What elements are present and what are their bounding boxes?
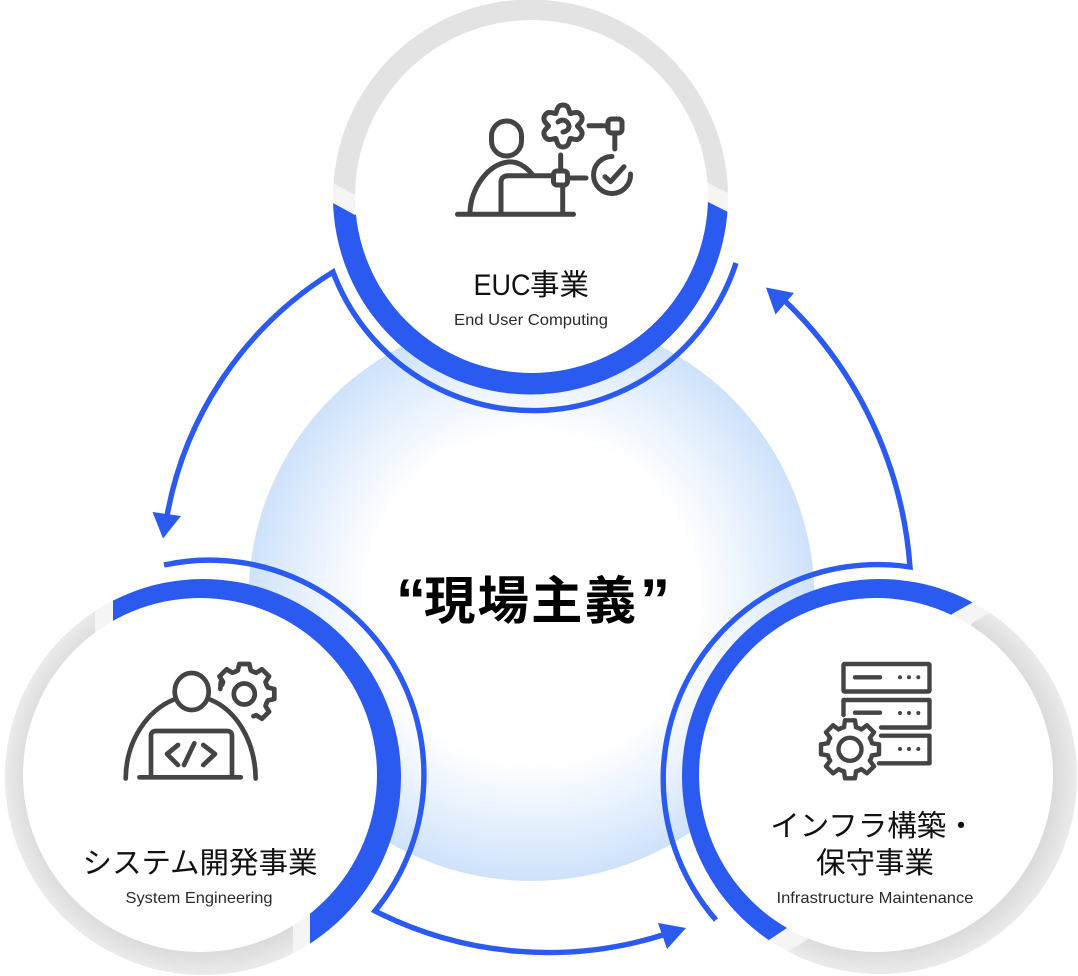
- arrow: infrastructure to EUC: [663, 288, 910, 920]
- title: 義: [584, 559, 636, 634]
- sublabel: EUC: End User Computing: [454, 312, 608, 329]
- icon: server rack with gear: [821, 664, 930, 778]
- title: ”: [640, 567, 670, 634]
- title: 現: [424, 559, 476, 634]
- label: EUC: 事業: [530, 262, 589, 304]
- panel: system engineering: [5, 579, 401, 975]
- panel: infrastructure: [682, 579, 1077, 974]
- icon: user with gear and check: [458, 105, 631, 214]
- icon: developer with laptop and gear: [126, 664, 274, 778]
- label: EUC: [474, 262, 589, 304]
- label: infrastructure: 保守事業: [816, 840, 934, 882]
- arrow: system engineering to infrastructure: [164, 560, 686, 953]
- sublabel: infrastructure: Infrastructure Maintenance: [776, 890, 974, 907]
- sublabel: system engineering: System Engineering: [126, 890, 272, 907]
- title: 場: [478, 559, 529, 634]
- title: 主: [531, 559, 583, 634]
- central gradient circle: [248, 315, 814, 881]
- label: system engineering: システム開発事業: [82, 840, 318, 882]
- label: infrastructure: インフラ構築・: [770, 803, 976, 845]
- arrow: EUC to system engineering: [152, 263, 736, 538]
- title: “: [396, 567, 426, 634]
- label: EUC: EUC: [474, 269, 530, 302]
- panel: EUC: [333, 0, 728, 394]
